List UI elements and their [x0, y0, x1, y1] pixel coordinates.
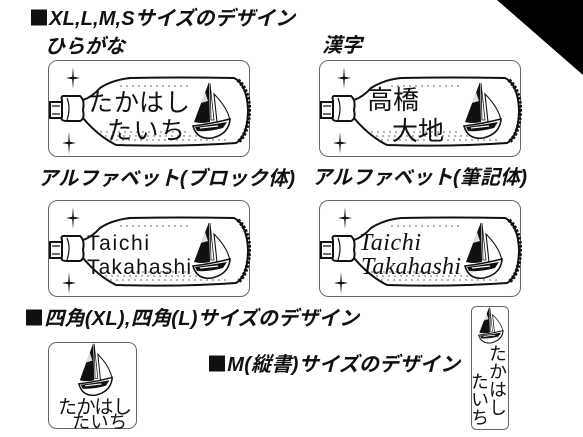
panel: alphabet block label design: Taichi [87, 232, 149, 255]
panel: alphabet block label design: Takahashi [87, 256, 191, 279]
heading: square size design: ■四角(XL),四角(L)サイズのデザイン [24, 302, 361, 331]
panel: hiragana label design: たいち [107, 111, 185, 147]
panel: alphabet script label design: Taichi [359, 230, 421, 256]
heading: XL,L,M,S size design: ■XL,L,M,Sサイズのデザイン [29, 2, 297, 31]
panel: alphabet script label design [320, 200, 520, 296]
label: alphabet block: アルファベット(ブロック体) [38, 167, 295, 190]
panel: alphabet script label design: Takahashi [361, 254, 461, 280]
panel: square label design: たいち [72, 408, 127, 434]
panel: kanji label design [320, 60, 520, 156]
panel: hiragana label design: たかはし [88, 83, 190, 119]
panel: kanji label design: 大地 [392, 111, 444, 148]
label: hiragana: ひらがな [45, 35, 127, 58]
label: alphabet script: アルファベット(筆記体) [312, 166, 527, 189]
label: kanji: 漢字 [322, 35, 365, 57]
corner black triangle [497, 0, 583, 75]
panel: vertical label design: たいち [467, 372, 493, 426]
panel: kanji label design: 高橋 [367, 80, 419, 117]
panel: square label design: たかはし [58, 392, 132, 419]
panel: alphabet block label design [48, 200, 250, 296]
panel: vertical label design [467, 306, 511, 430]
panel: square label design [48, 342, 136, 434]
heading: M vertical size design: ■M(縦書)サイズのデザイン [207, 348, 462, 377]
panel: hiragana label design [48, 60, 250, 156]
panel: vertical label design: たかはし [485, 344, 511, 416]
